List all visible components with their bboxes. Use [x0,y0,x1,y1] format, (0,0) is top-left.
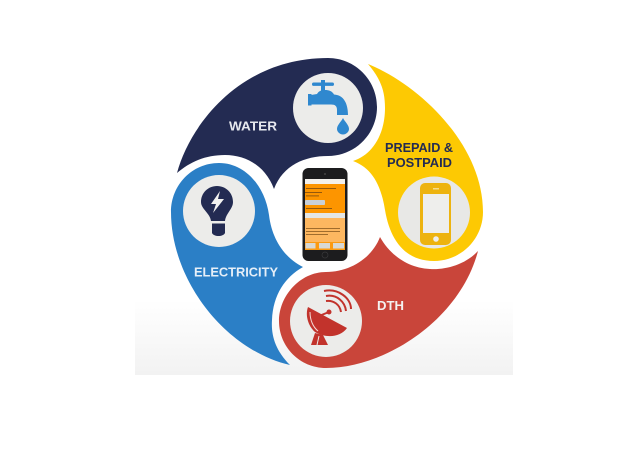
label: prepaid and postpaid [385,141,453,170]
panel: electricity [171,163,303,365]
icon: water tap [308,80,349,134]
panel: water [177,58,377,189]
center smartphone [302,168,348,261]
panel: dth [279,237,478,368]
label: prepaid and postpaid: POSTPAID [387,156,452,170]
icon: satellite dish [307,290,351,345]
icon: light bulb [201,186,233,236]
icon: mobile phone [420,183,451,245]
label: prepaid and postpaid: PREPAID & [385,141,453,155]
background floor gradient [135,300,513,375]
label: electricity: ELECTRICITY [194,266,279,280]
panel: prepaid and postpaid [353,64,483,261]
label: water: WATER [229,120,277,134]
label: dth: DTH [377,299,404,313]
